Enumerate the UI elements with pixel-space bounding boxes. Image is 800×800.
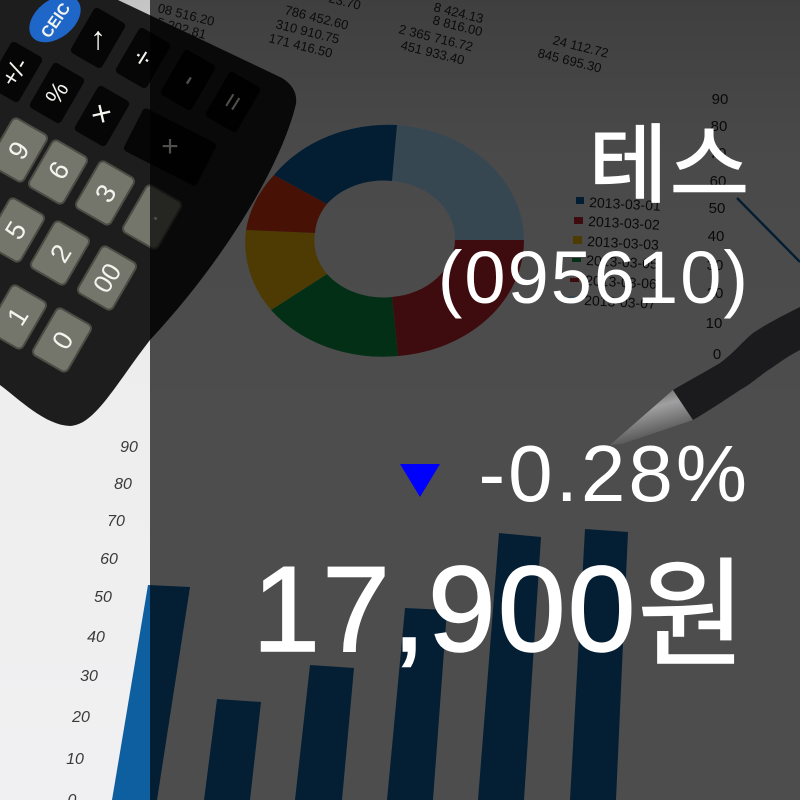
data table text: 845 695.30: [536, 45, 603, 76]
percent change: -0.28%: [479, 429, 750, 518]
left axis labels: 10: [66, 751, 84, 768]
key labels: %: [40, 77, 75, 109]
key labels: [0, 0, 250, 355]
left axis labels: [66, 439, 138, 800]
left axis labels: 40: [87, 629, 105, 646]
key labels: CEIC: [38, 0, 74, 41]
donut legend: 2013-03-05: [586, 252, 658, 272]
calculator body: [0, 0, 296, 426]
right axis labels: 70: [710, 145, 726, 162]
key labels: +: [161, 130, 179, 163]
key labels: ↑: [90, 20, 106, 56]
stock code: (095610): [438, 236, 750, 319]
donut legend: [569, 194, 661, 312]
donut legend: 2013-03-01: [589, 194, 661, 214]
right axis labels: 40: [708, 228, 724, 245]
data table text: 786 452.60: [283, 2, 350, 33]
data table text: 451 933.40: [399, 37, 466, 68]
key labels: 3: [89, 179, 123, 208]
right axis labels: 0: [713, 346, 721, 363]
data table text: 08 516.20: [156, 0, 216, 29]
data table text: 310 910.75: [274, 16, 341, 47]
grey number keys: [0, 117, 183, 373]
right axis labels: [706, 91, 728, 363]
left axis labels: 60: [100, 551, 118, 568]
data table text: 8 424.13: [432, 0, 485, 26]
key labels: -: [171, 67, 204, 93]
donut legend: 2013-03-07: [584, 292, 656, 312]
key labels: ÷: [125, 43, 160, 72]
right axis labels: 90: [712, 91, 728, 108]
black function keys: [0, 6, 262, 187]
donut chart: [245, 125, 524, 357]
left axis labels: 80: [114, 476, 132, 493]
key labels: 0: [46, 326, 80, 355]
donut legend: 2013-03-02: [588, 213, 660, 233]
right chart line: [737, 198, 800, 262]
right axis labels: 20: [707, 285, 723, 302]
key labels: ×: [81, 96, 121, 131]
left axis labels: 90: [120, 439, 138, 456]
right axis labels: 30: [707, 257, 723, 274]
key labels: .: [134, 203, 164, 226]
key labels: 00: [87, 258, 127, 298]
pen: [610, 307, 800, 445]
left axis labels: 70: [107, 513, 125, 530]
icon: blue down triangle: [400, 464, 440, 497]
data table text: 5 202.81: [155, 14, 208, 42]
key labels: 6: [42, 156, 76, 185]
data table text: [155, 0, 610, 76]
key labels: 2: [44, 239, 78, 268]
heading: company name: 테스: [589, 95, 751, 220]
right axis labels: 80: [711, 118, 727, 135]
data table text: 24 112.72: [551, 32, 610, 61]
left axis labels: 30: [80, 668, 98, 685]
key labels: 5: [0, 216, 33, 245]
data table text: 171 416.50: [267, 30, 334, 61]
data table text: 8 816.00: [431, 12, 484, 39]
left axis labels: 20: [71, 709, 90, 726]
key labels: =: [215, 87, 250, 117]
data table text: 2 365 716.72: [397, 21, 475, 54]
right axis labels: 50: [709, 200, 725, 217]
key labels: 9: [2, 136, 36, 165]
calculator: [0, 0, 296, 426]
donut legend: 2013-03-06: [585, 272, 657, 292]
bar chart: [112, 529, 628, 800]
key labels: 1: [1, 302, 35, 331]
left axis labels: 50: [94, 589, 112, 606]
price: 17,900원: [252, 519, 746, 690]
CEIC blue key: [20, 0, 90, 52]
right axis labels: 60: [710, 173, 726, 190]
right axis labels: 10: [706, 315, 722, 332]
donut legend: 2013-03-03: [587, 233, 659, 253]
